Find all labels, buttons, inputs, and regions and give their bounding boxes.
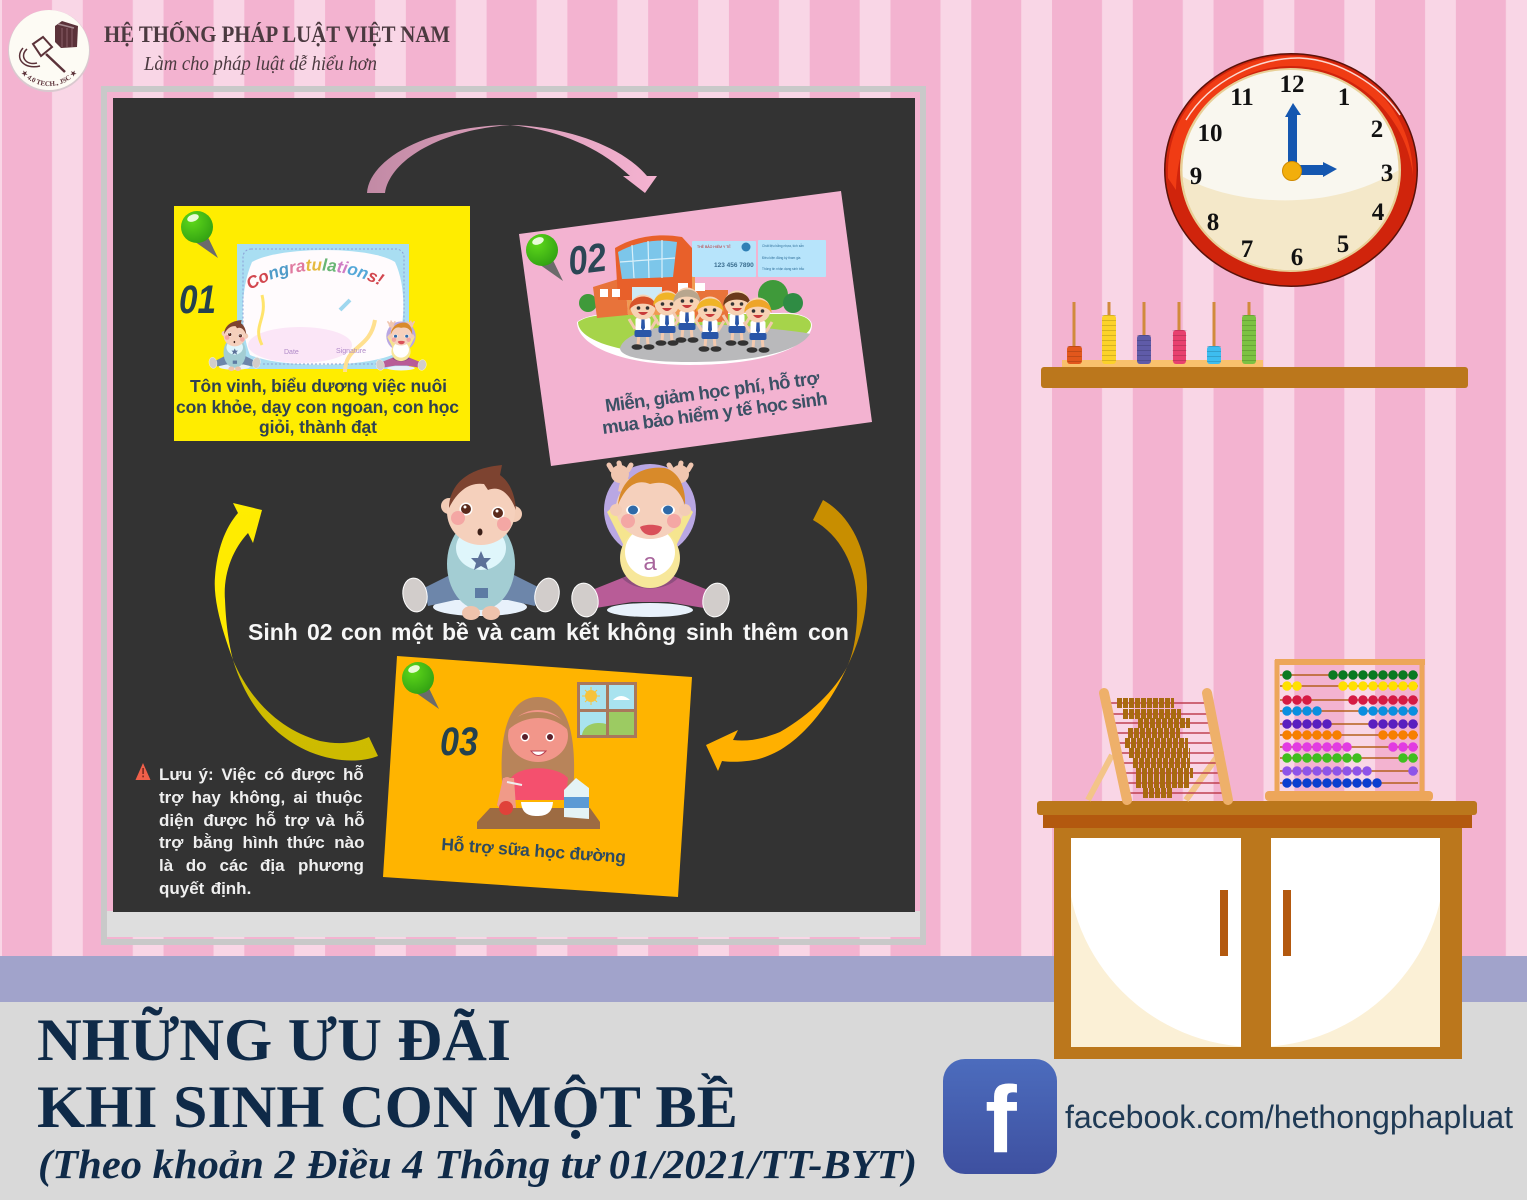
central statement: bề xyxy=(442,619,469,645)
clock xyxy=(1164,53,1418,287)
note text: do xyxy=(186,856,207,875)
clock numerals: 5 xyxy=(1337,231,1349,258)
shelf with bead toy xyxy=(1041,302,1468,388)
window illustration xyxy=(577,682,637,738)
note text: diện xyxy=(159,811,194,830)
title: NHỮNG ƯU ĐÃI xyxy=(37,1007,511,1073)
clock hands xyxy=(1285,103,1337,177)
icon: baby girl xyxy=(569,463,732,619)
certificate illustration xyxy=(237,244,409,372)
panel: card 02 xyxy=(519,191,872,466)
card 02 text: mua bảo hiểm y tế học sinh xyxy=(601,388,829,438)
icon: pin 03 xyxy=(402,662,439,709)
central statement: con xyxy=(808,619,849,645)
insurance card front xyxy=(692,241,756,277)
central statement: 02 xyxy=(307,619,333,645)
clock numerals: 4 xyxy=(1372,199,1385,226)
note text: các xyxy=(220,856,248,875)
icon: gavel xyxy=(20,37,65,72)
note text: hay xyxy=(192,788,221,807)
note text: không, xyxy=(230,788,285,807)
certificate signature: Signature xyxy=(336,348,366,355)
note text: hình xyxy=(242,833,278,852)
note text: trợ xyxy=(159,788,184,807)
bib letter: a xyxy=(643,549,657,576)
central statement: không xyxy=(607,619,676,645)
arrow: yellow xyxy=(215,503,378,761)
note text: hỗ xyxy=(343,765,364,784)
clock numerals: 3 xyxy=(1381,160,1393,187)
note xyxy=(136,763,365,898)
central statement: kết xyxy=(566,619,600,645)
note text: ai xyxy=(293,788,308,807)
clock numerals: 2 xyxy=(1371,116,1383,143)
chalkboard xyxy=(113,98,915,912)
clock numerals: 8 xyxy=(1207,209,1219,236)
girl eating illustration xyxy=(477,697,600,829)
floor xyxy=(0,1002,1527,1200)
right door xyxy=(1271,838,1440,1047)
school illustration xyxy=(577,235,826,365)
panel: card 03 xyxy=(383,656,692,897)
icon: baby boy xyxy=(400,465,562,620)
note text: trợ xyxy=(159,833,184,852)
note text: và xyxy=(316,811,335,830)
number 03: 03 xyxy=(440,720,478,764)
panel: card 01 xyxy=(174,206,470,441)
note text: có xyxy=(264,765,284,784)
insurance card front: 123 456 7890 xyxy=(714,262,754,269)
note text: phương xyxy=(298,856,364,875)
icon: facebook xyxy=(943,1059,1057,1174)
central statement: con xyxy=(341,619,382,645)
icon: small girl xyxy=(375,321,427,371)
title xyxy=(37,1007,738,1140)
central statement: cam xyxy=(510,619,556,645)
cabinet xyxy=(1037,801,1477,1059)
clock numerals: 11 xyxy=(1230,84,1254,111)
note text: quyết xyxy=(159,879,205,898)
central statement: thêm xyxy=(743,619,798,645)
icon: facebook: f xyxy=(985,1067,1017,1173)
note text: hỗ xyxy=(256,811,276,830)
clock numerals: 1 xyxy=(1338,84,1350,111)
arrow: orange xyxy=(706,500,867,771)
left door xyxy=(1071,838,1241,1047)
insurance card back xyxy=(758,240,826,277)
card 01 text xyxy=(176,376,459,437)
clock numerals xyxy=(1190,71,1393,271)
note text: Lưu xyxy=(159,765,192,784)
note text xyxy=(159,765,365,898)
icon: warning xyxy=(136,763,150,780)
note text: thuộc xyxy=(316,788,362,807)
logo xyxy=(8,10,90,92)
note text: định. xyxy=(211,879,251,898)
central statement: và xyxy=(477,619,503,645)
clock numerals: 12 xyxy=(1280,71,1304,98)
abacus: tilted xyxy=(1088,693,1228,800)
insurance card back: Thông tin nhận dạng sinh trắc xyxy=(762,266,805,271)
clock numerals: 6 xyxy=(1291,244,1303,271)
note text: Việc xyxy=(221,765,256,784)
note text: là xyxy=(159,856,174,875)
wall stripes xyxy=(0,0,1527,957)
number 01: 01 xyxy=(179,278,216,322)
note text: thức xyxy=(287,833,325,852)
central statement: Sinh xyxy=(248,619,298,645)
icon: pin 01 xyxy=(181,211,218,258)
note text: được xyxy=(203,811,248,830)
logo caption: ★ 4.0 TECH., JSC ★ xyxy=(22,70,76,86)
title: KHI SINH CON MỘT BỀ xyxy=(37,1074,738,1140)
students xyxy=(629,288,772,353)
card 03 text: Hỗ trợ sữa học đường xyxy=(441,833,627,867)
central statement: một xyxy=(391,619,434,645)
card 01 text: con khỏe, dạy con ngoan, con học xyxy=(176,397,459,417)
note text: bằng xyxy=(193,833,233,852)
note text: được xyxy=(291,765,335,784)
note text: trợ xyxy=(285,811,310,830)
card 02 text: Miễn, giảm học phí, hỗ trợ xyxy=(604,367,822,416)
note text: hỗ xyxy=(344,811,365,830)
arrow: pink xyxy=(367,125,657,193)
lavender skirting band xyxy=(0,956,1527,1002)
abacus: upright xyxy=(1265,659,1433,801)
icon: pin 02 xyxy=(526,234,563,281)
clock numerals: 7 xyxy=(1241,236,1253,263)
icon: books xyxy=(55,21,78,48)
brand name: HỆ THỐNG PHÁP LUẬT VIỆT NAM xyxy=(104,21,450,47)
insurance card front: THẺ BẢO HIỂM Y TẾ xyxy=(697,244,731,249)
icon: small boy xyxy=(208,320,262,371)
note text: ý: xyxy=(198,765,214,784)
certificate date: Date xyxy=(284,349,299,356)
facebook address: facebook.com/hethongphapluat xyxy=(1065,1099,1513,1135)
card 01 text: Tôn vinh, biểu dương việc nuôi xyxy=(190,376,447,396)
clock numerals: 9 xyxy=(1190,163,1202,190)
card 01 text: giỏi, thành đạt xyxy=(259,417,377,437)
clock numerals: 10 xyxy=(1198,120,1222,147)
insurance card back: Điều kiện đăng ký tham gia xyxy=(762,256,801,260)
central statement: sinh xyxy=(686,619,733,645)
insurance card back: Chất liệu bằng nhựa, tích sẵn xyxy=(762,243,804,248)
board ledge xyxy=(107,911,920,937)
note text: nào xyxy=(334,833,365,852)
subtitle: (Theo khoản 2 Điều 4 Thông tư 01/2021/TT-BYT) xyxy=(38,1141,917,1187)
number 02: 02 xyxy=(566,236,609,284)
certificate heading: Congratulations! xyxy=(248,258,385,288)
board frame xyxy=(104,89,923,942)
note text: địa xyxy=(260,856,285,875)
brand tagline: Làm cho pháp luật dễ hiểu hơn xyxy=(143,54,377,75)
